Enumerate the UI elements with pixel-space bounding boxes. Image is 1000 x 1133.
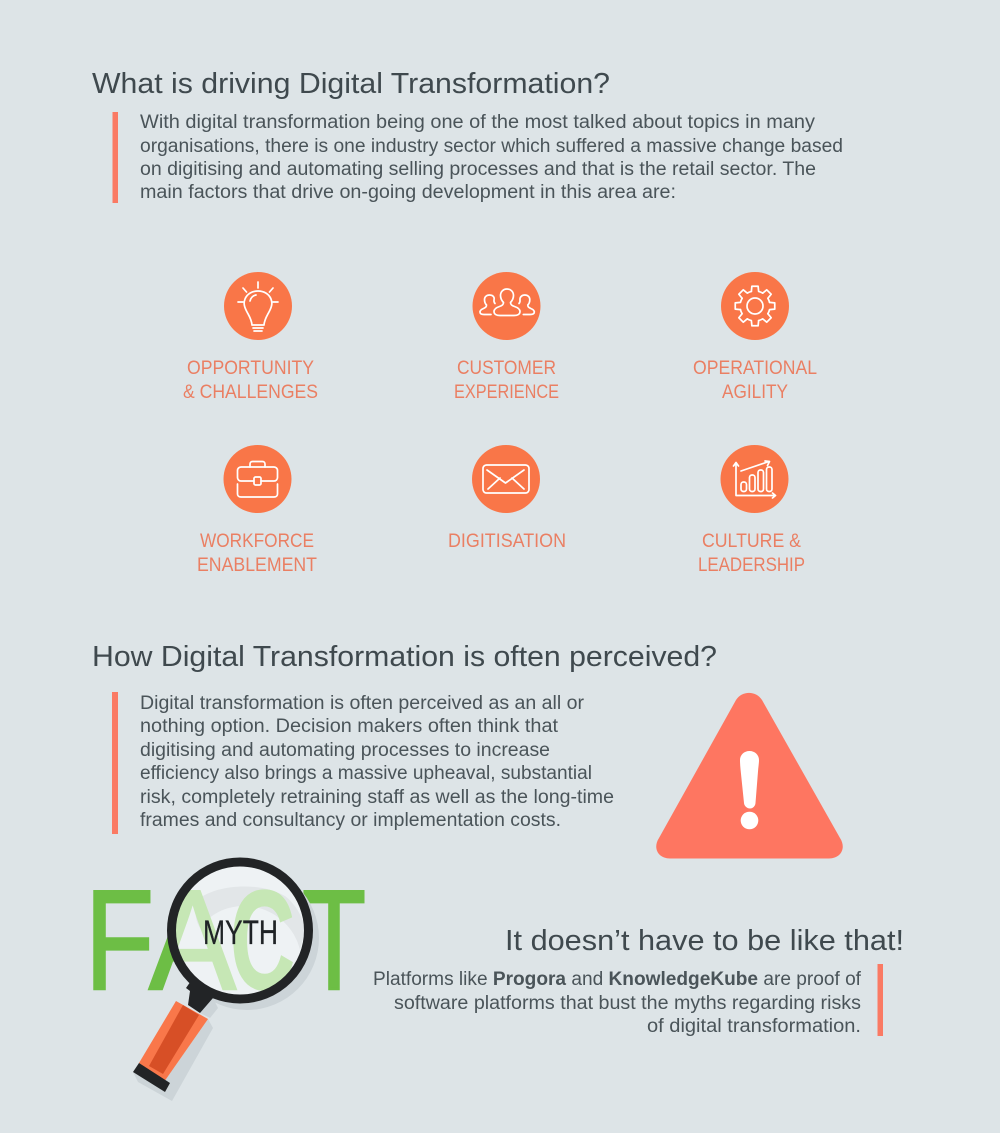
- intro paragraph: [140, 112, 843, 203]
- label: ENABLEMENT: [197, 554, 317, 576]
- lens glass: [172, 862, 308, 998]
- accent bar: perception: [112, 692, 118, 834]
- conclusion paragraph: Platforms like Progora and KnowledgeKube are proof of: [373, 969, 862, 990]
- pale letters inside lens: C: [230, 861, 295, 1020]
- perception paragraph: risk, completely retraining staff as well as the long-time: [140, 787, 614, 808]
- word: fact: C: [230, 861, 295, 1020]
- handle neck: [186, 978, 214, 1013]
- accent bar: conclusion: [878, 964, 883, 1036]
- conclusion paragraph: software platforms that bust the myths regarding risks: [394, 993, 861, 1014]
- intro paragraph: on digitising and automating selling processes and that is the retail sector. The: [140, 159, 816, 180]
- label: LEADERSHIP: [698, 554, 805, 576]
- label: [454, 357, 559, 403]
- handle cap: [133, 1063, 170, 1092]
- label: & CHALLENGES: [183, 381, 318, 403]
- handle stripe: [149, 1005, 199, 1074]
- label: CULTURE &: [702, 530, 801, 552]
- icon: warning triangle: [656, 693, 843, 858]
- pale letters inside lens: [176, 889, 293, 991]
- perception paragraph: Digital transformation is often perceived as an all or: [140, 693, 585, 714]
- word: fact: F: [85, 861, 154, 1020]
- label: AGILITY: [722, 381, 788, 403]
- lens ring: [172, 862, 308, 999]
- word: fact: [85, 861, 366, 1020]
- intro paragraph: With digital transformation being one of the most talked about topics in many: [140, 112, 816, 133]
- myth word: MYTH: [203, 914, 278, 952]
- heading: it does not have to be: It doesn’t have to be like that!: [505, 925, 904, 957]
- icon: people: [472, 272, 540, 340]
- perception paragraph: frames and consultancy or implementation costs.: [140, 810, 561, 831]
- factor: opportunity and challenges: [183, 272, 318, 403]
- conclusion paragraph: [373, 969, 862, 1037]
- perception paragraph: efficiency also brings a massive upheaval, substantial: [140, 763, 592, 784]
- perception paragraph: digitising and automating processes to increase: [140, 740, 550, 761]
- word: fact: T: [302, 861, 366, 1020]
- accent bar: intro: [112, 112, 118, 203]
- conclusion paragraph: of digital transformation.: [647, 1016, 861, 1037]
- factor: culture and leadership: [698, 445, 805, 576]
- label: [693, 357, 817, 403]
- handle: [139, 1001, 208, 1082]
- icon: gear: [721, 272, 789, 340]
- word: fact: A: [149, 861, 236, 1020]
- label: OPPORTUNITY: [187, 357, 314, 379]
- label: OPERATIONAL: [693, 357, 817, 379]
- icon: briefcase: [224, 445, 292, 513]
- perception paragraph: nothing option. Decision makers often think that: [140, 716, 559, 737]
- lens reflection: [196, 886, 305, 950]
- label: CUSTOMER: [457, 357, 556, 379]
- pale letters inside lens: A: [149, 861, 236, 1020]
- magnifier shadow: [133, 866, 319, 1101]
- heading: what is driving: What is driving Digital Transformation?: [92, 68, 610, 100]
- illustration: magnifying glass over fact: [85, 861, 366, 1101]
- label: [698, 530, 805, 576]
- intro paragraph: main factors that drive on-going development in this area are:: [140, 182, 676, 203]
- label: DIGITISATION: [448, 530, 566, 552]
- label: EXPERIENCE: [454, 381, 559, 403]
- perception paragraph: [140, 693, 614, 831]
- label: [183, 357, 318, 403]
- label: WORKFORCE: [200, 530, 314, 552]
- factor: customer experience: [454, 272, 559, 403]
- icon: light bulb: [224, 272, 292, 340]
- intro paragraph: organisations, there is one industry sector which suffered a massive change based: [140, 136, 843, 157]
- heading: how perceived: How Digital Transformation is often perceived?: [92, 641, 717, 673]
- factor: operational agility: [693, 272, 817, 403]
- icon: growth chart: [720, 445, 788, 513]
- icon: envelope: [472, 445, 540, 513]
- factor: digitisation: [448, 445, 566, 552]
- label: [197, 530, 317, 576]
- factor: workforce enablement: [197, 445, 317, 576]
